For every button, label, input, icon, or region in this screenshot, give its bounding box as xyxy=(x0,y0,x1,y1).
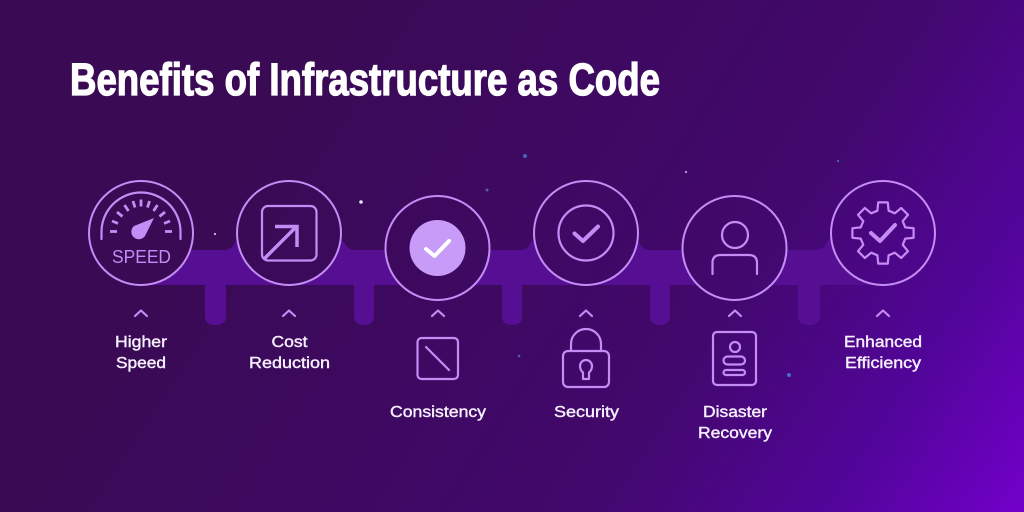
item: Consistency xyxy=(386,196,490,421)
label: Enhanced xyxy=(844,334,922,351)
item: Cost Reduction xyxy=(237,181,341,372)
label: Security xyxy=(554,404,619,421)
chevron xyxy=(283,310,295,316)
efficiency circle xyxy=(831,181,935,285)
icon: arrow box xyxy=(262,206,316,260)
label: Reduction xyxy=(249,355,330,372)
label: Disaster xyxy=(703,404,767,421)
item: Security xyxy=(534,181,638,421)
item: Enhanced Efficiency xyxy=(831,181,935,372)
stars xyxy=(214,154,839,377)
security circle xyxy=(534,181,638,285)
label: Speed xyxy=(116,355,166,372)
label: Recovery xyxy=(698,425,772,442)
speed circle xyxy=(89,181,193,285)
item: Higher Speed xyxy=(89,181,193,372)
chevron xyxy=(729,310,741,316)
icon: padlock xyxy=(563,329,609,387)
icon: speedometer: SPEED xyxy=(112,246,171,267)
chevron xyxy=(877,310,889,316)
icon: id card xyxy=(713,332,756,385)
label: Higher xyxy=(115,334,167,351)
item: Disaster Recovery xyxy=(682,196,786,442)
icon: person xyxy=(712,222,757,274)
label: Consistency xyxy=(390,404,486,421)
cost circle xyxy=(237,181,341,285)
chevron xyxy=(580,310,592,316)
label: Efficiency xyxy=(845,355,921,372)
chevron xyxy=(135,310,147,316)
icon: circled check xyxy=(558,206,614,260)
icon: square with slash xyxy=(418,338,458,379)
icon: gear with check xyxy=(852,202,914,264)
chevron xyxy=(432,310,444,316)
connecting band xyxy=(141,238,883,325)
icon: filled check xyxy=(410,220,466,276)
title: Benefits of Infrastructure as Code xyxy=(70,54,660,105)
disaster circle xyxy=(682,196,786,300)
label: Cost xyxy=(272,334,308,351)
icon: speedometer xyxy=(102,193,180,267)
consistency circle xyxy=(386,196,490,300)
